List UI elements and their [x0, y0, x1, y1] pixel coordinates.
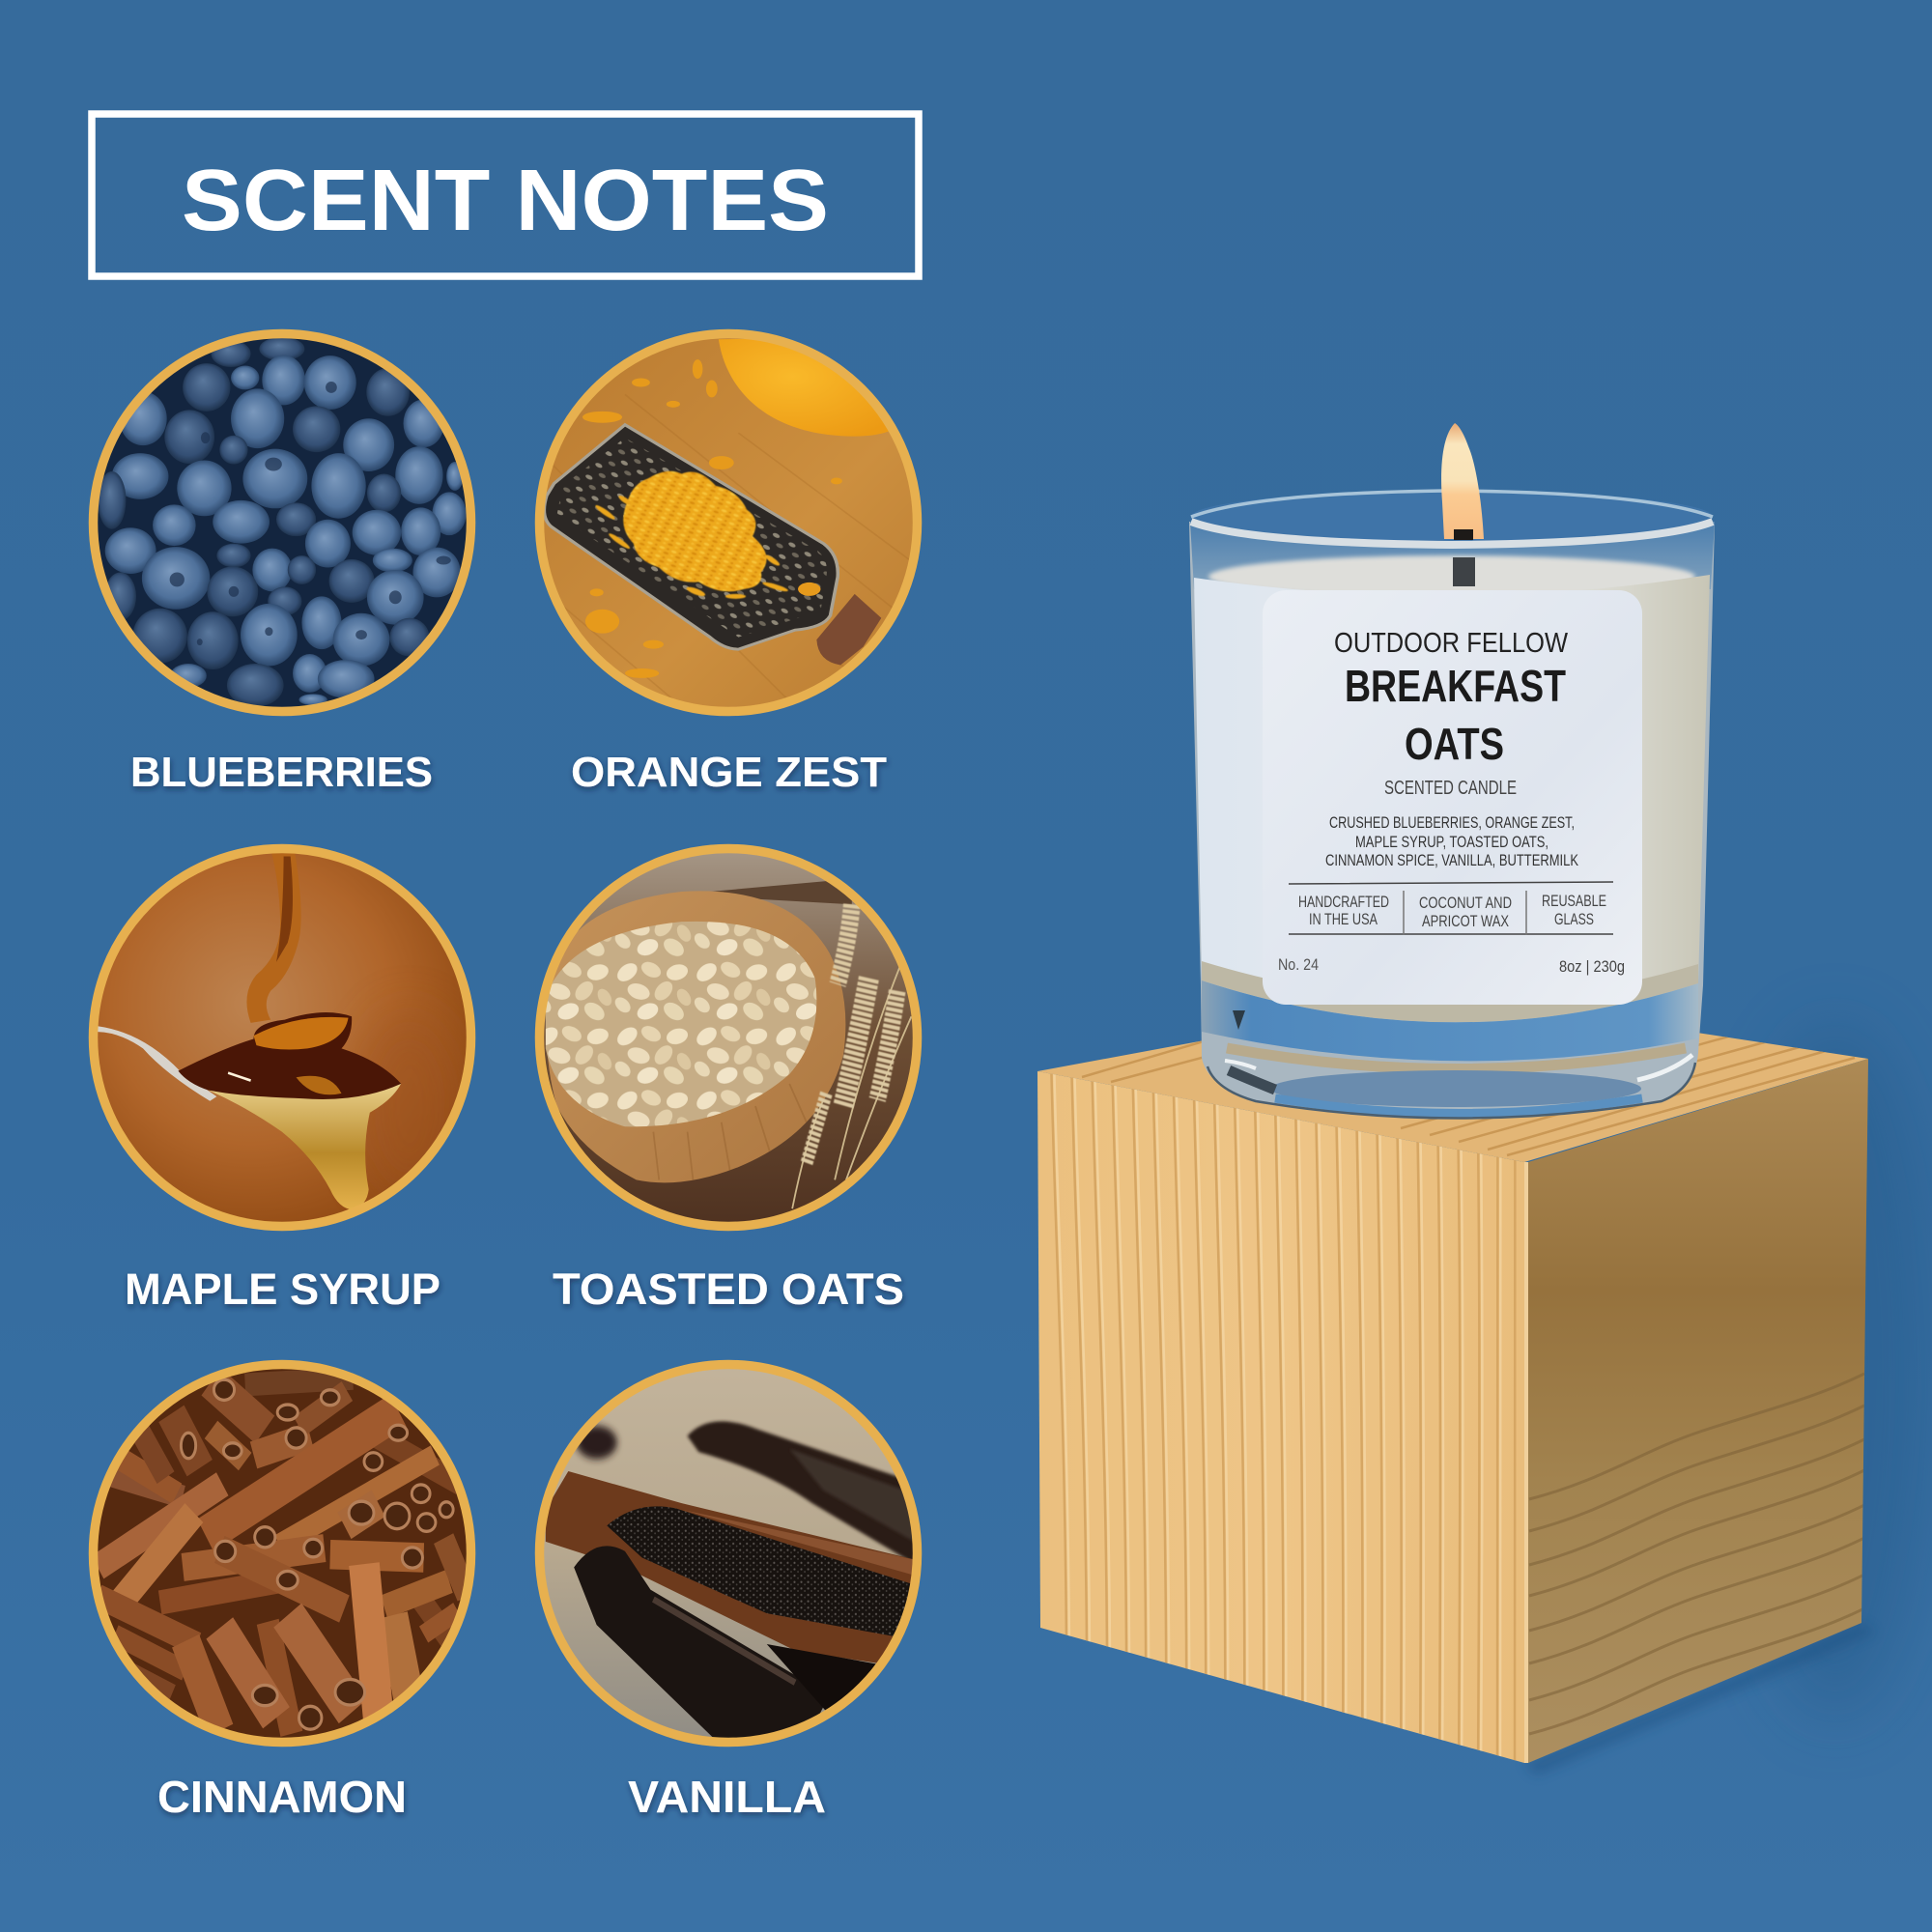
- zest pile: [594, 471, 789, 599]
- scent note: cinnamon: [87, 1356, 477, 1822]
- block shadow: [1524, 1623, 1876, 1776]
- wax lower shading: [1202, 961, 1698, 1022]
- subtitle: SCENTED CANDLE: [1384, 778, 1517, 799]
- title box: [92, 114, 919, 276]
- blue band of base: [1202, 980, 1698, 1061]
- photo: vanilla pods: [531, 1356, 922, 1747]
- feature strip: COCONUT AND: [1419, 894, 1512, 912]
- front edge highlight: [1524, 1162, 1528, 1763]
- notes text: CRUSHED BLUEBERRIES, ORANGE ZEST,: [1329, 813, 1575, 832]
- wax surface: [1208, 555, 1695, 598]
- inner base: [1270, 1070, 1641, 1107]
- photo: orange zest on grater: [544, 338, 913, 707]
- lemon: [719, 337, 903, 437]
- product name line 2: OATS: [1405, 719, 1504, 769]
- label: VANILLA: [628, 1772, 826, 1822]
- scent note: orange zest: [531, 328, 922, 796]
- block right face: [1528, 1059, 1868, 1763]
- base mark: [1233, 1010, 1245, 1030]
- wooden block: [1037, 995, 1876, 1777]
- rim back: [1191, 491, 1713, 517]
- rim front: [1191, 522, 1713, 545]
- brand: OUTDOOR FELLOW: [1334, 628, 1569, 659]
- scent note: toasted oats: [531, 840, 922, 1314]
- label: TOASTED OATS: [553, 1264, 904, 1314]
- block top face: [1037, 995, 1868, 1162]
- label: BLUEBERRIES: [130, 749, 433, 796]
- label: [1263, 590, 1642, 1005]
- notes text: CINNAMON SPICE, VANILLA, BUTTERMILK: [1325, 851, 1579, 869]
- scent note: blueberries: [87, 328, 477, 796]
- notes text: MAPLE SYRUP, TOASTED OATS,: [1355, 833, 1548, 851]
- wick: [1454, 529, 1473, 540]
- dark syrup: [178, 1012, 401, 1099]
- ring: [539, 334, 918, 711]
- block front face: [1037, 1053, 1524, 1777]
- handle: [816, 594, 881, 665]
- tan reflection: [1227, 1048, 1686, 1068]
- spoon handle: [98, 1026, 216, 1101]
- photo: blueberries: [98, 338, 467, 707]
- size: 8oz | 230g: [1559, 957, 1625, 976]
- wheat stalks: [792, 952, 911, 1208]
- scent note: vanilla: [531, 1356, 922, 1822]
- oat flakes: [546, 922, 816, 1126]
- grater: [544, 425, 838, 649]
- photo: cinnamon sticks: [87, 1356, 477, 1747]
- ring: [93, 334, 471, 711]
- label: CINNAMON: [157, 1772, 407, 1822]
- label: ORANGE ZEST: [571, 749, 887, 796]
- feature strip: APRICOT WAX: [1422, 912, 1509, 930]
- ring: [93, 1364, 471, 1743]
- feature strip: HANDCRAFTED: [1298, 893, 1389, 911]
- feature strip: [1289, 882, 1613, 935]
- bowl: [547, 891, 845, 1182]
- scent note: maple syrup: [87, 840, 477, 1314]
- flecks: [582, 359, 842, 678]
- ring: [539, 1364, 918, 1743]
- wax body: [1194, 575, 1710, 1022]
- shadow behind block: [1739, 1024, 1932, 1719]
- photo: maple syrup on spoon: [98, 853, 467, 1222]
- candle: [1189, 423, 1715, 1119]
- photo: oats in wooden bowl: [544, 853, 913, 1222]
- feature strip: REUSABLE: [1542, 892, 1606, 910]
- feature strip: IN THE USA: [1309, 910, 1378, 928]
- title: SCENT NOTES: [182, 153, 829, 249]
- ring: [539, 848, 918, 1227]
- upper glass band: [1190, 522, 1715, 589]
- stream: [246, 853, 301, 1023]
- ring: [93, 848, 471, 1227]
- wick base: [1453, 557, 1475, 586]
- inside of rim: [1191, 491, 1713, 543]
- glass body: [1189, 522, 1715, 1119]
- feature strip: GLASS: [1554, 910, 1594, 928]
- product name: BREAKFAST: [1345, 661, 1566, 711]
- glass jar and wax: [1189, 423, 1715, 1119]
- number: No. 24: [1278, 955, 1319, 974]
- flame: [1441, 423, 1484, 539]
- notes text: [1325, 813, 1579, 869]
- label: MAPLE SYRUP: [125, 1264, 440, 1314]
- spoon bowl: [209, 1084, 401, 1209]
